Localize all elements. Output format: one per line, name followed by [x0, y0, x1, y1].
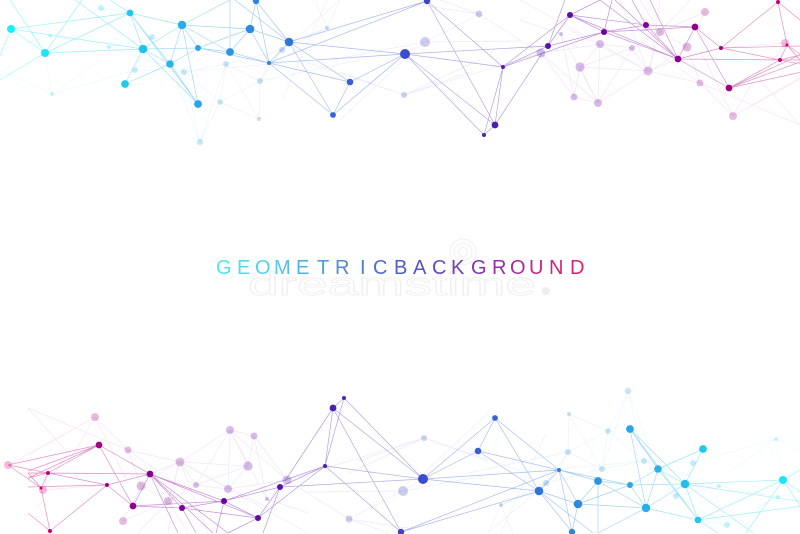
network: bottom band: [4, 388, 800, 534]
title: GEOMETRICBACKGROUND: [216, 257, 584, 279]
bright edges: [0, 0, 800, 135]
watermark registered mark: [542, 287, 550, 295]
faint nodes: [48, 5, 800, 145]
bright nodes: [7, 0, 788, 137]
watermark swirl: [450, 239, 476, 265]
watermark word: dreamstime: [248, 266, 536, 302]
faint edges: [0, 0, 800, 142]
watermark: [248, 239, 550, 302]
network: top band: [0, 0, 800, 145]
